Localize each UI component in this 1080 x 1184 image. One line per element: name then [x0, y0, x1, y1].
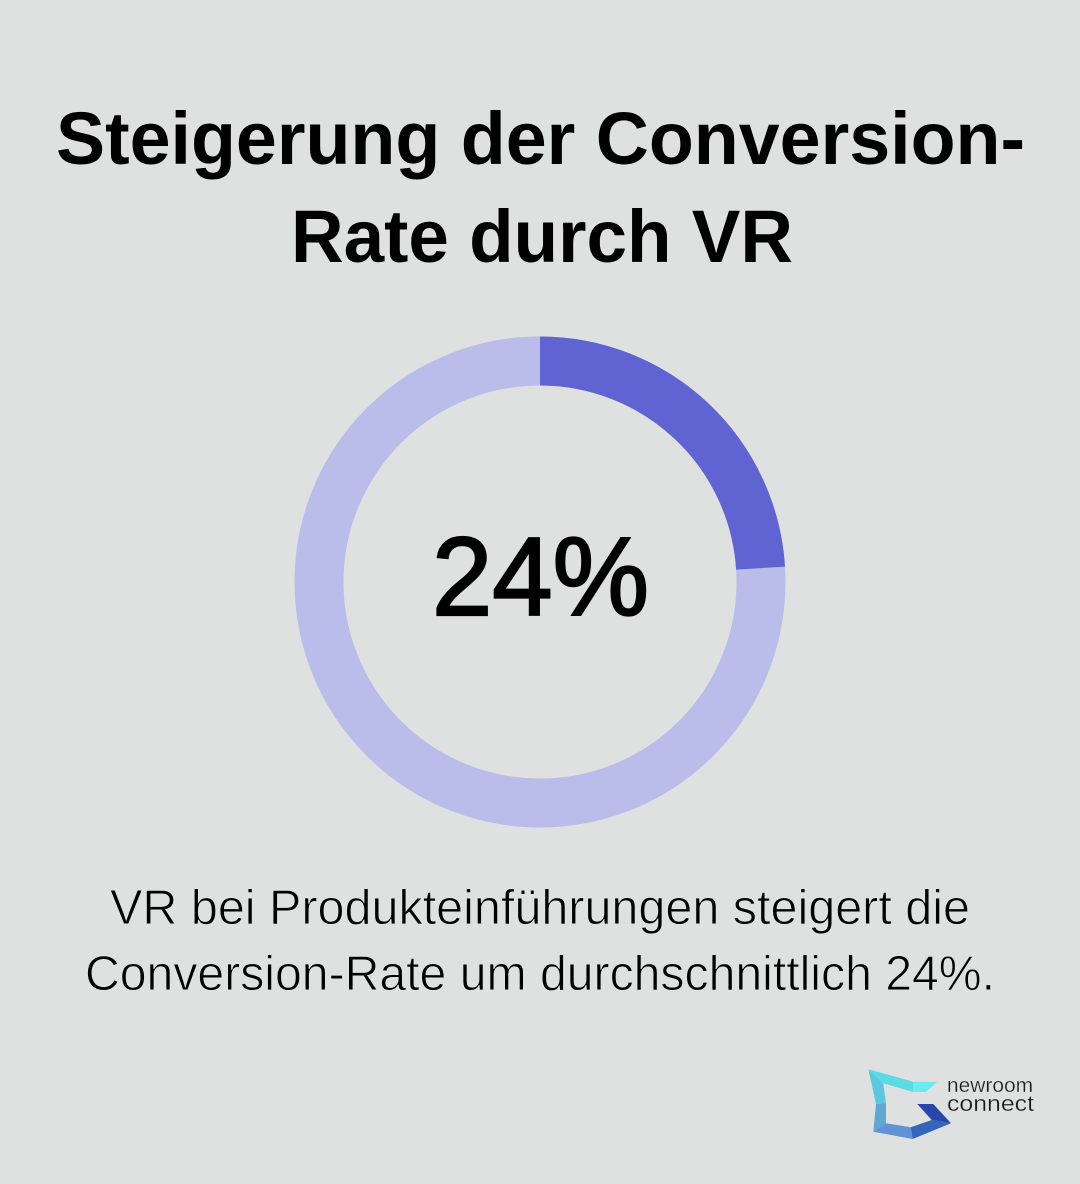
donut value: 24%	[432, 515, 649, 639]
logo wordmark: connect	[947, 1091, 1034, 1116]
description text	[85, 881, 995, 1001]
description text: VR bei Produkteinführungen steigert die	[110, 881, 970, 935]
title: Steigerung der Conversion-	[56, 97, 1025, 180]
donut chart: 24 percent	[319, 361, 761, 803]
description text: Conversion-Rate um durchschnittlich 24%.	[85, 947, 995, 1001]
title: Rate durch VR	[291, 195, 793, 278]
logo icon	[868, 1069, 951, 1139]
logo: newroom connect	[868, 1069, 1034, 1139]
title	[56, 97, 1025, 278]
logo wordmark	[947, 1075, 1034, 1116]
logo wordmark: newroom	[947, 1075, 1033, 1097]
